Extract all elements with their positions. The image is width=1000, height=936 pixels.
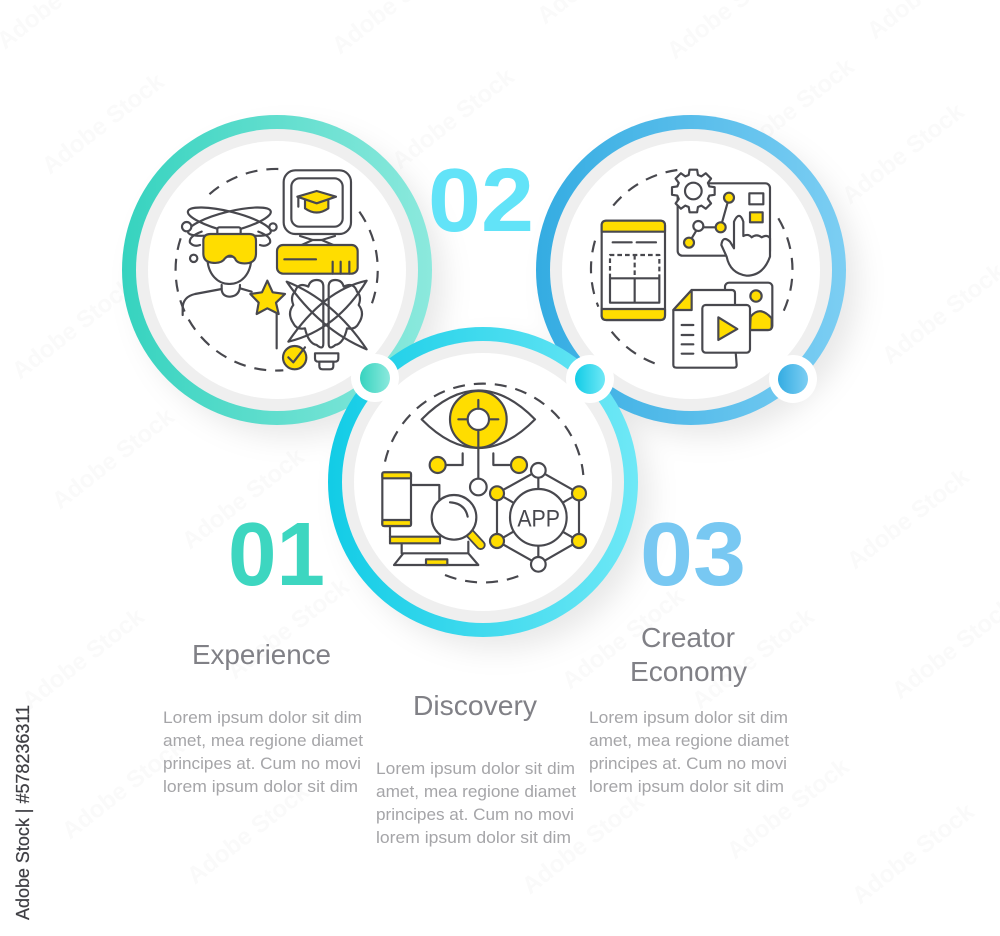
heading: creator economy: Economy	[630, 656, 747, 687]
icon: experience VR, education and brain	[176, 169, 378, 371]
faint watermark pattern: Adobe Stock	[847, 798, 980, 910]
faint watermark pattern: Adobe Stock	[842, 463, 975, 575]
text block: creator economy	[589, 709, 789, 796]
text block: experience: principes at. Cum no movi	[163, 755, 361, 773]
heading: experience: Experience	[192, 639, 331, 670]
faint watermark pattern: Adobe Stock	[47, 403, 180, 515]
connector dot: discovery	[566, 355, 614, 403]
connector dot: experience	[351, 354, 399, 402]
icon: discovery eye, devices and app network: APP	[517, 505, 560, 532]
faint watermark pattern: Adobe Stock	[57, 733, 190, 845]
text block: experience: Lorem ipsum dolor sit dim	[163, 709, 362, 727]
icon: discovery eye, devices and app network	[382, 384, 586, 582]
text block: creator economy: principes at. Cum no movi	[589, 755, 787, 773]
text block: experience: lorem ipsum dolor sit dim	[163, 778, 358, 796]
circle shadows	[138, 131, 858, 649]
text block: discovery: Lorem ipsum dolor sit dim	[376, 760, 575, 778]
faint watermark pattern: Adobe Stock	[17, 603, 150, 715]
text block: discovery: principes at. Cum no movi	[376, 806, 574, 824]
faint watermark pattern: Adobe Stock	[722, 753, 855, 865]
text block: discovery: lorem ipsum dolor sit dim	[376, 829, 571, 847]
faint watermark pattern: Adobe Stock	[7, 273, 140, 385]
faint watermark pattern: Adobe Stock	[177, 443, 310, 555]
text block: discovery	[376, 760, 576, 847]
number 02: 02	[428, 151, 534, 251]
panel: creator economy circle	[536, 115, 846, 425]
faint watermark pattern: Adobe Stock	[222, 573, 355, 685]
text block: creator economy: amet, mea regione diamet	[589, 732, 789, 750]
faint watermark pattern: Adobe Stock	[517, 788, 650, 900]
heading: creator economy	[630, 622, 747, 687]
number 03: 03	[640, 505, 746, 605]
number 01: 01	[228, 505, 325, 605]
faint watermark pattern: Adobe Stock	[182, 778, 315, 890]
faint watermark pattern: Adobe Stock	[37, 68, 170, 180]
faint watermark pattern: Adobe Stock	[387, 63, 520, 175]
faint watermark pattern: Adobe Stock	[727, 53, 860, 165]
faint watermark pattern: Adobe Stock	[687, 603, 820, 715]
text block: creator economy: lorem ipsum dolor sit dim	[589, 778, 784, 796]
connector dot: creator economy	[769, 355, 817, 403]
text block: discovery: amet, mea regione diamet	[376, 783, 576, 801]
icon: creator economy tablet, chart and media	[591, 170, 792, 368]
panel: discovery circle	[328, 327, 638, 637]
text block: creator economy: Lorem ipsum dolor sit dim	[589, 709, 788, 727]
heading: discovery: Discovery	[413, 690, 537, 721]
panel: experience circle	[122, 115, 432, 425]
stock credit: Adobe Stock | #578236311	[12, 705, 33, 920]
faint watermark pattern: Adobe Stock	[837, 98, 970, 210]
text block: experience	[163, 709, 363, 796]
heading: creator economy: Creator	[641, 622, 735, 653]
faint watermark pattern: Adobe Stock	[557, 583, 690, 695]
text block: experience: amet, mea regione diamet	[163, 732, 363, 750]
